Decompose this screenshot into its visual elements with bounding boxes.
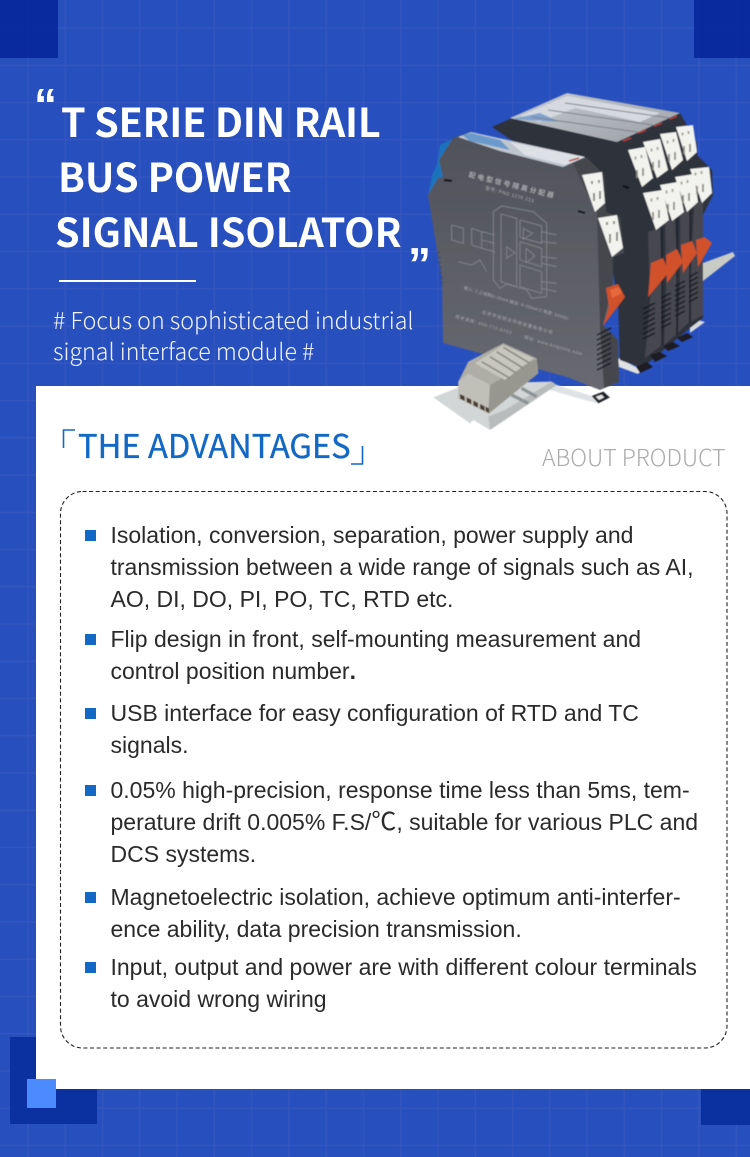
advantage 4: 0.05% high-precision, response time less than 5ms, tem- [110, 777, 690, 803]
front circuit diagram [452, 206, 557, 298]
front white terminals [582, 172, 623, 257]
front printed label: 型号: PNG 1270 213 [484, 185, 535, 204]
about product label: ABOUT PRODUCT [542, 439, 726, 473]
subtitle [53, 302, 414, 367]
subtitle: signal interface module # [53, 333, 314, 367]
heading text: THE ADVANTAGES [78, 421, 351, 468]
title line 2: BUS POWER [58, 147, 292, 204]
advantage 5: ence ability, data precision transmission. [110, 916, 522, 942]
front printed label: 网址: www.kingtone.com [523, 334, 583, 357]
advantage 5: Magnetoelectric isolation, achieve optimum anti-interfer- [110, 884, 681, 910]
advantage 1: transmission between a wide range of signals such as AI, [110, 554, 694, 580]
front vents [597, 328, 611, 370]
module narrow faces [645, 198, 703, 358]
mounting notches [444, 180, 585, 213]
module separators [662, 208, 690, 345]
front printed label [454, 170, 583, 357]
front right edge shade [573, 158, 624, 388]
terminal screw slots [634, 131, 703, 220]
advantage 1: AO, DI, DO, PI, PO, TC, RTD etc. [110, 586, 453, 612]
product illustration: isolator modules on DIN rail [428, 92, 736, 430]
corner block: top right [694, 0, 750, 58]
front blue clips [428, 138, 455, 196]
advantage 5 [85, 884, 681, 942]
title line 1: T SERIE DIN RAIL [61, 92, 380, 149]
title underline [59, 280, 196, 282]
back transparent cover [510, 93, 680, 142]
advantage 2 [85, 626, 641, 684]
advantage 6 [85, 954, 697, 1012]
advantage 3: USB interface for easy configuration of RTD and TC [110, 700, 639, 726]
right corner bracket [351, 446, 364, 465]
advantage 4: DCS systems. [110, 841, 256, 867]
advantage 2: Flip design in front, self-mounting measurement and [110, 626, 641, 652]
advantage 2: control position number. [110, 658, 356, 684]
back module group body [492, 93, 713, 368]
advantage 4 [85, 777, 698, 867]
advantage 3: signals. [110, 732, 188, 758]
back vents [643, 272, 698, 339]
front printed label: 技术支持: 400-771-6703 [454, 313, 513, 336]
front printed label: 输入: 2,三线制0~20mA 输出: 4~20mA*2 电源: 24VDC [463, 284, 570, 322]
left corner bracket [62, 429, 75, 448]
red cover marks [623, 116, 677, 141]
section heading: the advantages [62, 421, 364, 468]
back lower white terminals [643, 167, 712, 230]
back upper white terminals [628, 125, 697, 187]
advantage 1 [85, 522, 694, 612]
front transparent cover [458, 132, 585, 167]
advantage 3 [85, 700, 639, 758]
back orange connectors [648, 237, 712, 297]
accent square [27, 1079, 56, 1108]
advantage 4: perature drift 0.005% F.S/℃, suitable for various PLC and [110, 802, 698, 838]
back base feet [636, 333, 693, 373]
front side ribs [437, 252, 444, 283]
advantage 1: Isolation, conversion, separation, power supply and [110, 522, 633, 548]
title line 3: SIGNAL ISOLATOR [55, 202, 402, 259]
dashed list frame [60, 491, 728, 1048]
front orange connector [603, 284, 625, 326]
front printed label: 北京华创创业科技发展有限公司 [481, 309, 553, 336]
corner block: top left [0, 0, 58, 58]
corner block: bottom left [10, 1037, 97, 1124]
back din rail [618, 252, 735, 374]
terminal block and front din rail [433, 343, 610, 430]
white content panel [36, 386, 750, 1089]
corner block: bottom right [701, 1085, 750, 1125]
front module body [428, 132, 625, 390]
front printed label: 配电型信号隔离分配器 [468, 170, 555, 200]
advantage 6: to avoid wrong wiring [110, 986, 327, 1012]
advantage 6: Input, output and power are with different colour terminals [110, 954, 697, 980]
subtitle: # Focus on sophisticated industrial [53, 302, 414, 336]
